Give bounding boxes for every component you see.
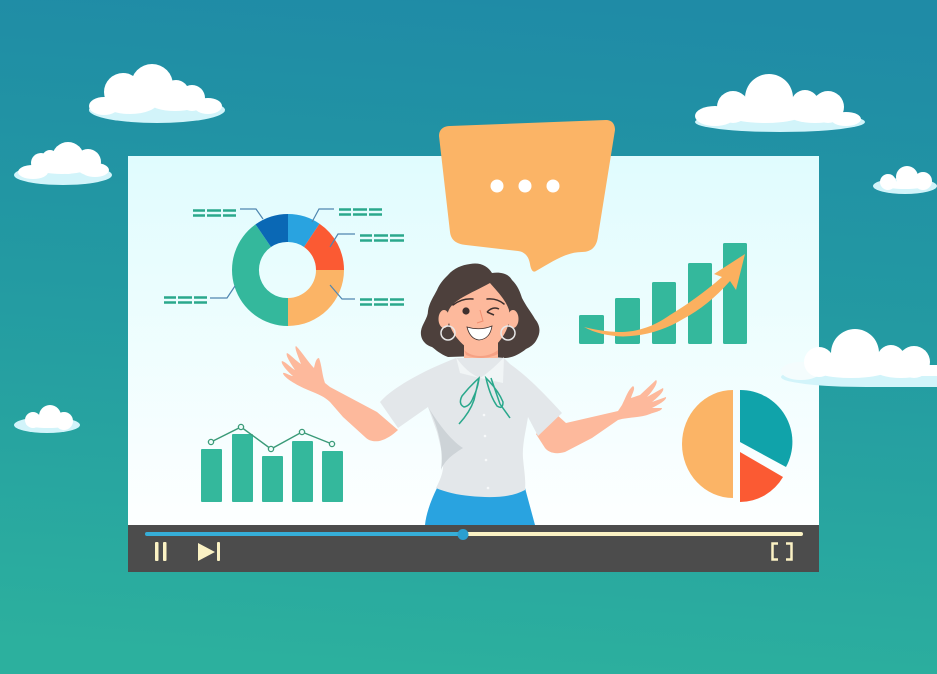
earrings (441, 326, 515, 340)
bar chart with arrow (579, 243, 747, 344)
right arm (536, 380, 666, 453)
growth arrow (584, 254, 745, 336)
speech bubble (439, 120, 615, 272)
pause icon (155, 542, 166, 561)
donut legends (164, 210, 404, 304)
next icon (198, 542, 220, 561)
neck (464, 342, 498, 378)
video control bar (128, 525, 819, 572)
cloud: overlapping screen edge (781, 329, 937, 387)
face (448, 283, 509, 351)
eyebrows (453, 299, 504, 305)
donut chart (210, 209, 355, 326)
skirt (425, 488, 535, 525)
ears (438, 310, 518, 328)
presenter (282, 263, 666, 525)
smile (467, 326, 492, 340)
trend line (211, 427, 332, 449)
left arm (282, 346, 398, 441)
nose (477, 310, 483, 323)
blouse (380, 358, 562, 497)
bar and line chart (201, 424, 343, 502)
pie chart (682, 390, 792, 502)
cloud: lower left (14, 405, 80, 433)
bubble dots (490, 180, 560, 192)
progress handle (458, 529, 468, 540)
cloud: right (873, 166, 937, 194)
neck shadow (464, 350, 498, 358)
donut leader lines (210, 209, 355, 299)
cloud: left (14, 142, 112, 185)
bow (459, 378, 510, 424)
video screen (128, 156, 819, 525)
blouse shadow (428, 407, 463, 470)
fullscreen icon (772, 544, 792, 560)
cloud: top left (89, 64, 225, 123)
eyes (462, 307, 470, 315)
progress track (463, 532, 803, 536)
hair (421, 263, 539, 358)
cloud: top right (695, 74, 865, 132)
buttons (483, 414, 489, 489)
progress filled (145, 532, 463, 536)
collar (456, 357, 504, 383)
